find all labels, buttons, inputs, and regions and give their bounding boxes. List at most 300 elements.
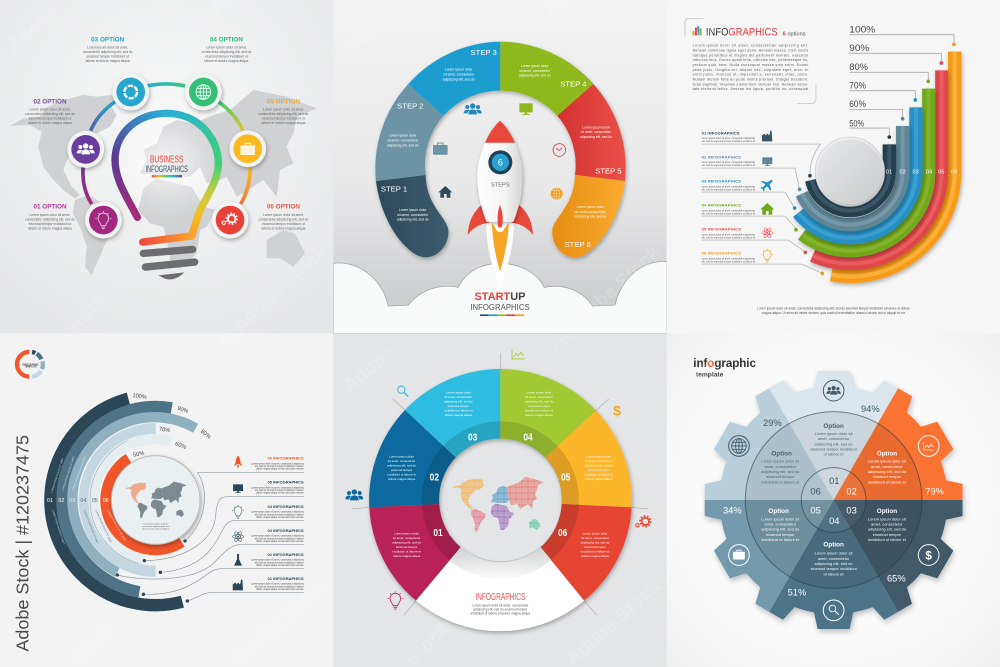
rocket centre fin — [498, 205, 503, 227]
sector 06 — [703, 388, 834, 502]
sector 04 text: dolore magna aliqua — [525, 413, 553, 417]
watermark — [663, 0, 998, 337]
option 02: eiusmod tempor — [873, 475, 902, 479]
band numbers: 03 — [913, 170, 919, 176]
band micro text: LOREM IPSUM DOLOR SIT AMET — [61, 455, 76, 491]
sector 05 text: adipiscing elit, sed do — [584, 464, 613, 468]
paragraph: tate eleifend tellus. Aenean leo ligula, porttitor eu, consequat — [693, 87, 808, 91]
footer text — [757, 307, 910, 315]
option 01 text: 01 OPTION — [33, 204, 67, 211]
watermark: Adobe Stock — [896, 242, 998, 337]
step lorem text: Lorem ipsum dolor — [399, 208, 426, 212]
band numbers: 06 — [951, 170, 957, 176]
option 04 — [810, 541, 858, 576]
list leader dots — [793, 174, 824, 275]
step 5 segment — [557, 84, 626, 181]
watermark: Adobe Stock — [229, 242, 331, 337]
icon: briefcase — [729, 545, 749, 565]
paragraph: Aenean commodo ligula eget dolor. Aenean massa. Cum sociis — [693, 49, 809, 53]
band micro text: LOREM IPSUM DOLOR SIT AMET — [50, 457, 65, 493]
option 04 text: consectetur adipiscing elit, sed do — [201, 50, 252, 54]
option 04 text: Lorem ipsum dolor sit amet, — [206, 46, 247, 50]
step lorem text: Lorem ipsum dolor — [582, 125, 610, 129]
percentage leader lines — [849, 35, 954, 135]
inner shade ring — [430, 430, 570, 570]
step lorem text: Lorem ipsum dolor — [445, 68, 472, 72]
option 05 text: eiusmod tempor incididunt ut — [262, 116, 305, 120]
list item 05: Lorem ipsum dolor sit amet, consectetur adipiscing — [702, 233, 756, 236]
paragraph: Cras dapibus. Vivamus elementum semper nisi. Aenean vulpu- — [693, 82, 809, 86]
band numbers: 01 — [47, 498, 53, 504]
option 05: eiusmod tempor — [766, 533, 795, 537]
background — [0, 0, 333, 333]
clouds — [333, 262, 667, 333]
sector 05 text: eiusmod tempor — [588, 468, 609, 472]
icon: magnifier — [398, 386, 408, 397]
list item 02: 02 INFOGRAPHICS — [702, 154, 741, 159]
watermark: Adobe — [336, 6, 396, 61]
sector numbers: 04 — [523, 432, 533, 443]
bulb outline — [115, 113, 218, 242]
sector 01 text: adipiscing elit, sed do — [392, 540, 421, 544]
option 04: eiusmod tempor incididunt — [810, 567, 858, 571]
percentage labels: 50% — [849, 118, 864, 128]
band micro text: LOREM IPSUM DOLOR SIT AMET — [94, 509, 112, 544]
percentage labels: 70% — [158, 427, 171, 434]
list item 05: elit, sed do eiusmod tempor incididunt ut labore — [255, 489, 304, 492]
band 100% — [50, 399, 182, 605]
background — [333, 333, 667, 667]
icon: monitor — [233, 484, 243, 493]
band numbers — [47, 498, 109, 504]
node 01: bulb icon — [85, 202, 122, 238]
arc band 04 — [802, 89, 929, 251]
watermark: Adobe — [546, 299, 606, 354]
option 04: ut labore et — [824, 572, 844, 576]
band numbers: 04 — [80, 498, 86, 504]
title text: Lorem ipsum dolor sit amet, consectetur — [472, 603, 528, 607]
dotted world map — [449, 470, 549, 536]
list item 01: 01 INFOGRAPHICS — [702, 130, 740, 135]
option 06 text: labore et dolore magna aliqua — [261, 227, 306, 231]
band 90% — [62, 407, 172, 592]
centre numbers: 03 — [846, 506, 857, 516]
option 06: adipiscing elit, sed do — [761, 470, 799, 474]
node 05: briefcase icon — [229, 130, 266, 167]
icon: magnifier — [823, 600, 844, 621]
icon: house — [760, 203, 774, 215]
list item 06: Lorem ipsum dolor sit amet, consectetur adipiscing — [251, 462, 304, 465]
step labels: STEP 5 — [595, 166, 621, 175]
band micro text: LOREM IPSUM DOLOR SIT AMET — [82, 509, 99, 545]
icon: flask — [234, 554, 242, 566]
percentage labels: 80% — [849, 62, 868, 72]
option 05 text: Lorem ipsum dolor sit amet, — [263, 107, 304, 111]
sector numbers: 05 — [561, 472, 571, 483]
panel: growth arcs infographic — [663, 0, 998, 337]
list item 06: elit, sed do eiusmod tempor incididunt ut labore et — [702, 260, 755, 263]
step lorem text — [387, 64, 612, 222]
list item 04 — [702, 203, 756, 215]
watermark: Adobe — [213, 299, 273, 354]
watermark — [673, 299, 998, 667]
list item 02: 02 INFOGRAPHICS — [267, 552, 304, 557]
band micro text: LOREM IPSUM DOLOR SIT AMET — [71, 455, 87, 491]
sector 05 — [545, 411, 632, 507]
option 06 text: consectetur adipiscing elit, sed do — [258, 218, 309, 222]
paragraph: natoque penatibus et magnis dis parturient montes, nascetur — [693, 53, 809, 57]
percentages — [723, 404, 944, 598]
percentage labels: 70% — [849, 81, 866, 91]
list item 02: Lorem ipsum dolor sit amet, consectetur adipiscing — [702, 161, 756, 164]
sector 02 text: eiusmod tempor — [391, 468, 412, 472]
list item 03 — [251, 528, 304, 543]
small donut logo — [17, 352, 43, 377]
sector 04 text: adipiscing elit, sed do — [525, 400, 554, 404]
step lorem text: adipiscing elit, sed do — [443, 77, 475, 81]
sector 05 text: sit amet, consectetur — [585, 459, 613, 463]
icon: people — [464, 103, 482, 114]
list item 04: Lorem ipsum dolor sit amet, consectetur adipiscing — [702, 209, 756, 212]
ring segments — [375, 42, 626, 257]
band numbers: 05 — [92, 498, 98, 504]
list item 04 — [251, 504, 304, 519]
watermark: Stock — [732, 285, 784, 337]
option 04: Option — [823, 541, 844, 548]
colour bar — [480, 314, 524, 316]
sector 04 text: sit amet, consectetur — [525, 395, 553, 399]
list item 03: 03 INFOGRAPHICS — [702, 179, 741, 184]
node 04: globe icon — [185, 74, 222, 110]
band numbers: 04 — [926, 170, 932, 176]
list item 01: Lorem ipsum dolor sit amet, consectetur adipiscing — [251, 583, 304, 586]
option 05: Lorem ipsum dolor sit — [761, 517, 799, 521]
sector 06 text: sit amet, consectetur — [581, 536, 609, 540]
list item 06 — [702, 251, 756, 263]
step 1 segment — [376, 175, 448, 257]
watermark: Adobe — [663, 16, 723, 71]
option 04 text: labore et dolore magna aliqua — [204, 59, 249, 63]
watermark — [65, 299, 331, 667]
centre numbers: 04 — [829, 516, 839, 526]
arc band 05 — [813, 70, 942, 264]
icon: globe — [550, 187, 563, 200]
list item 06: 06 INFOGRAPHICS — [702, 251, 741, 256]
option 04: amet, consectetur — [818, 557, 850, 561]
option 05 — [761, 508, 800, 542]
arc band 03 — [798, 107, 916, 238]
icon: clock — [553, 144, 566, 156]
leader dots — [116, 539, 189, 603]
option 03 — [868, 508, 907, 542]
list item 02: elit, sed do eiusmod tempor incididunt ut labore — [255, 561, 304, 564]
icon: monitor — [762, 157, 772, 166]
sector 04 text: Lorem ipsum dolor — [527, 391, 551, 395]
percentages: 34% — [723, 506, 742, 516]
title: business infographics: INFOGRAPHICS — [146, 164, 188, 174]
icon: atom — [233, 531, 244, 542]
watermark: Stock — [60, 288, 113, 340]
sector 03 — [405, 369, 500, 457]
option 06 text: 06 OPTION — [267, 204, 300, 211]
option 01 — [810, 423, 858, 457]
option 04 text: eiusmod tempor incididunt ut — [205, 55, 248, 59]
step lorem text: Lorem ipsum dolor — [389, 134, 416, 138]
world map — [10, 90, 317, 275]
option 06: eiusmod tempor — [766, 475, 795, 479]
heading: INFOGRAPHICS — [706, 26, 778, 38]
option 02: adipiscing elit, sed do — [868, 470, 906, 474]
step lorem text: sit amet, consectetur — [581, 130, 612, 134]
icon: globe — [729, 436, 749, 456]
step lorem text: sit amet, consectetur — [397, 213, 429, 217]
centre caption: do eiusmod tempor incididunt — [143, 527, 169, 530]
percentage labels: 100% — [849, 24, 875, 34]
arc band 02 — [802, 126, 903, 225]
sector 06 text: eiusmod tempor — [584, 545, 606, 549]
sector spikes — [352, 353, 648, 615]
option 06 text: eiusmod tempor incididunt ut — [262, 222, 305, 226]
option 01 text — [25, 204, 75, 231]
list item 02: elit, sed do eiusmod tempor incididunt ut labore et — [702, 164, 755, 167]
step lorem text: adipiscing elit, sed do — [580, 135, 612, 139]
title: business infographics: BUSINESS — [150, 154, 183, 165]
list item 06: elit, sed do eiusmod tempor incididunt ut labore — [255, 465, 304, 468]
panel: circular sectors infographic — [334, 299, 666, 667]
icon: bulb — [761, 249, 773, 262]
sector 03 text: adipiscing elit, sed do — [444, 400, 473, 404]
option 03: eiusmod tempor — [873, 533, 902, 537]
footer text: magna aliqua. Ut enim ad minim veniam, quis nostrud exercitation ullamco laboris nisi ut aliquip ex ea — [762, 311, 905, 315]
percentages: 51% — [788, 588, 806, 598]
icon: dollar: $ — [925, 548, 932, 562]
icon: rocket — [234, 456, 242, 469]
step 6 segment — [552, 175, 625, 257]
sector 01 — [369, 504, 461, 601]
watermark: Adobe — [673, 342, 733, 397]
band numbers: 03 — [69, 498, 75, 504]
background — [0, 333, 333, 667]
percentages: 29% — [763, 418, 782, 428]
percentage labels: 90% — [849, 43, 869, 53]
option 06: Lorem ipsum dolor sit — [761, 460, 799, 464]
band micro text — [50, 455, 127, 545]
watermark: Adobe Stock — [563, 242, 665, 337]
globe glow — [110, 107, 223, 220]
paragraph: Lorem ipsum dolor sit amet, consectetuer adipiscing elit. — [693, 44, 808, 48]
option 02 text: 02 OPTION — [33, 98, 67, 105]
step lorem text: adipiscing elit, sed do — [519, 74, 551, 78]
background — [667, 333, 1000, 667]
sector 01 text: dolore magna aliqua — [393, 554, 421, 558]
icon: bulb — [387, 591, 403, 609]
arc band 06 — [831, 52, 955, 276]
option 01: amet, consectetur — [818, 437, 850, 441]
option 04 text: 04 OPTION — [210, 36, 243, 43]
header icon: small bars — [693, 26, 702, 35]
centre numbers: 01 — [829, 476, 839, 486]
sector 03 text: dolore magna aliqua — [445, 413, 472, 417]
list item 06 — [251, 456, 304, 471]
panel: concentric arcs infographic — [12, 299, 331, 667]
sector 02 text: Lorem ipsum dolor — [389, 455, 414, 459]
centre numbers: 05 — [810, 506, 821, 516]
rocket body — [477, 121, 522, 222]
bulb screw base — [143, 249, 195, 279]
band micro text: LOREM IPSUM DOLOR SIT AMET — [106, 509, 127, 543]
title: startup infographics — [470, 291, 530, 312]
percentage labels — [849, 24, 875, 128]
list item 04: elit, sed do eiusmod tempor incididunt ut labore — [255, 513, 304, 516]
list item 05 — [702, 227, 756, 239]
sector numbers — [430, 432, 571, 539]
sector 06 text: incididunt ut labore et — [581, 549, 609, 553]
centre numbers: 06 — [810, 486, 821, 496]
list item 02: dolore magna aliqua ut enim ad minim veniam — [256, 564, 304, 567]
sector 01 text: sit amet, consectetur — [393, 536, 421, 540]
band numbers: 05 — [938, 170, 944, 176]
list item 01: elit, sed do eiusmod tempor incididunt ut labore et — [702, 140, 755, 143]
outer arc connecting options — [83, 84, 250, 204]
band numbers: 06 — [103, 498, 109, 504]
option 05: adipiscing elit, sed do — [761, 528, 799, 532]
list item 03: elit, sed do eiusmod tempor incididunt ut labore — [255, 537, 304, 540]
list item 01: dolore magna aliqua ut enim ad minim veniam — [256, 588, 304, 591]
option 02 text: eiusmod tempor incididunt ut — [29, 116, 71, 120]
icon: home — [438, 186, 452, 198]
centre disc — [111, 456, 200, 544]
sector 05 text: incididunt ut labore et — [584, 473, 613, 477]
title: startup infographics: STARTUP — [474, 291, 526, 303]
option 05 text: consectetur adipiscing elit, sed do — [258, 112, 309, 116]
step lorem text: adipiscing elit, sed do — [397, 218, 429, 222]
rocket window with step count — [488, 150, 512, 174]
option 01: eiusmod tempor incididunt — [810, 447, 858, 451]
sector numbers: 02 — [430, 472, 439, 483]
step labels: STEP 2 — [397, 102, 423, 111]
list item 03: elit, sed do eiusmod tempor incididunt ut labore et — [702, 188, 755, 191]
sector 02 text: dolore magna aliqua — [388, 477, 416, 481]
node 02: people icon — [67, 131, 104, 168]
percentage labels: 80% — [199, 429, 212, 440]
option 05: incididunt ut labore et — [761, 538, 800, 542]
title: business infographics — [146, 154, 188, 177]
step labels: STEP 3 — [471, 48, 497, 57]
vertical stock caption: Adobe Stock | #120237475 — [12, 435, 32, 652]
logo text: INFOGRAPHIC — [23, 364, 39, 366]
percentage labels — [132, 393, 212, 459]
percentage leader dots — [887, 43, 956, 139]
list item 01: 01 INFOGRAPHICS — [267, 576, 304, 581]
option 01 text: labore et dolore magna aliqua — [28, 227, 72, 231]
option 05 text — [258, 98, 309, 125]
sectors — [369, 369, 632, 631]
centre numbers: 02 — [846, 486, 857, 496]
sector 04 text: eiusmod tempor — [528, 404, 550, 408]
title: infographic template: template — [696, 372, 724, 379]
sector 02 text: incididunt ut labore et — [387, 473, 416, 477]
option 03 text: 03 OPTION — [91, 36, 125, 43]
step lorem text: adipiscing elit, sed do — [574, 215, 606, 219]
paragraph — [693, 44, 809, 91]
title: startup infographics: INFOGRAPHICS — [470, 303, 530, 312]
white title sector — [416, 547, 584, 631]
subheading: 6 options — [783, 32, 806, 38]
step lorem text: sit amet, consectetur — [575, 210, 607, 214]
option 06 text — [258, 204, 309, 231]
sector 06 text: adipiscing elit, sed do — [581, 540, 610, 544]
option 03 text: labore et dolore magna aliqua — [86, 59, 130, 63]
sector 03 text: incididunt ut labore et — [444, 409, 473, 413]
footer text: Lorem ipsum dolor sit amet, consectetur adipiscing elit, sed do eiusmod tempor incididunt ut labore et dolore — [757, 307, 910, 311]
list item 02 — [702, 154, 756, 167]
sector 01 text: Lorem ipsum dolor — [394, 531, 419, 535]
sector 05 text: dolore magna aliqua — [585, 477, 613, 481]
centre caption: consectetur adipiscing elit, sed — [142, 525, 169, 528]
watermark — [340, 299, 665, 667]
watermark — [3, 0, 331, 340]
option 01: Option — [823, 423, 844, 430]
title text: adipiscing elit, sed do eiusmod tempor — [473, 607, 527, 611]
list item 05: elit, sed do eiusmod tempor incididunt ut labore et — [702, 236, 755, 239]
title: infographic template: infographic — [693, 357, 756, 370]
option 03 text: consectetur adipiscing elit, sed do — [83, 50, 133, 54]
list item 04: dolore magna aliqua ut enim ad minim veniam — [256, 516, 304, 519]
sector 02 text: sit amet, consectetur — [388, 459, 416, 463]
sector 06 text: Lorem ipsum dolor — [583, 531, 607, 535]
sector 03 text: Lorem ipsum dolor — [446, 391, 471, 395]
step labels — [381, 48, 621, 249]
list item 04: 04 INFOGRAPHICS — [267, 504, 304, 509]
rocket window with step count: 6 — [498, 158, 503, 168]
percentage labels: 60% — [174, 441, 187, 451]
list item 01 — [702, 130, 756, 143]
leader lines — [117, 473, 304, 601]
option 02: Lorem ipsum dolor sit — [868, 460, 906, 464]
icon: monitor — [519, 103, 533, 115]
icon: gear — [636, 516, 651, 527]
option 06: incididunt ut labore et — [761, 480, 800, 484]
arc band 01 — [812, 144, 889, 211]
option 03 text: eiusmod tempor incididunt ut — [86, 55, 129, 59]
percentage labels: 60% — [849, 99, 866, 109]
sector 01 text: incididunt ut labore et — [392, 549, 421, 553]
sector 01 — [769, 370, 900, 500]
paragraph: pretium quis, sem. Nulla consequat massa quis enim. Donec — [693, 63, 809, 67]
sector 05 — [703, 500, 834, 616]
list item 05: dolore magna aliqua ut enim ad minim veniam — [256, 492, 304, 495]
option 01 text: consectetur adipiscing elit, sed do — [25, 218, 75, 222]
icon: plane — [760, 180, 773, 191]
gear with six sectors — [703, 370, 967, 635]
option 03: incididunt ut labore et — [868, 538, 907, 542]
option 05 text: 05 OPTION — [267, 98, 300, 105]
step lorem text: Lorem ipsum dolor — [521, 64, 548, 68]
step labels: STEP 4 — [560, 79, 587, 88]
ring outline — [75, 420, 236, 580]
watermark — [336, 0, 665, 337]
option 03 text — [83, 36, 133, 63]
sector 05 text: Lorem ipsum dolor — [586, 455, 611, 459]
step lorem text: sit amet, consectetur — [519, 69, 551, 73]
sector 04 — [500, 369, 596, 457]
icon: bulb — [232, 505, 244, 518]
option 02: amet, consectetur — [871, 465, 903, 469]
title: infographic template — [693, 357, 756, 379]
option 01 text: eiusmod tempor incididunt ut — [29, 222, 71, 226]
band 70% — [84, 429, 156, 571]
panel: gear infographic — [667, 299, 1000, 667]
